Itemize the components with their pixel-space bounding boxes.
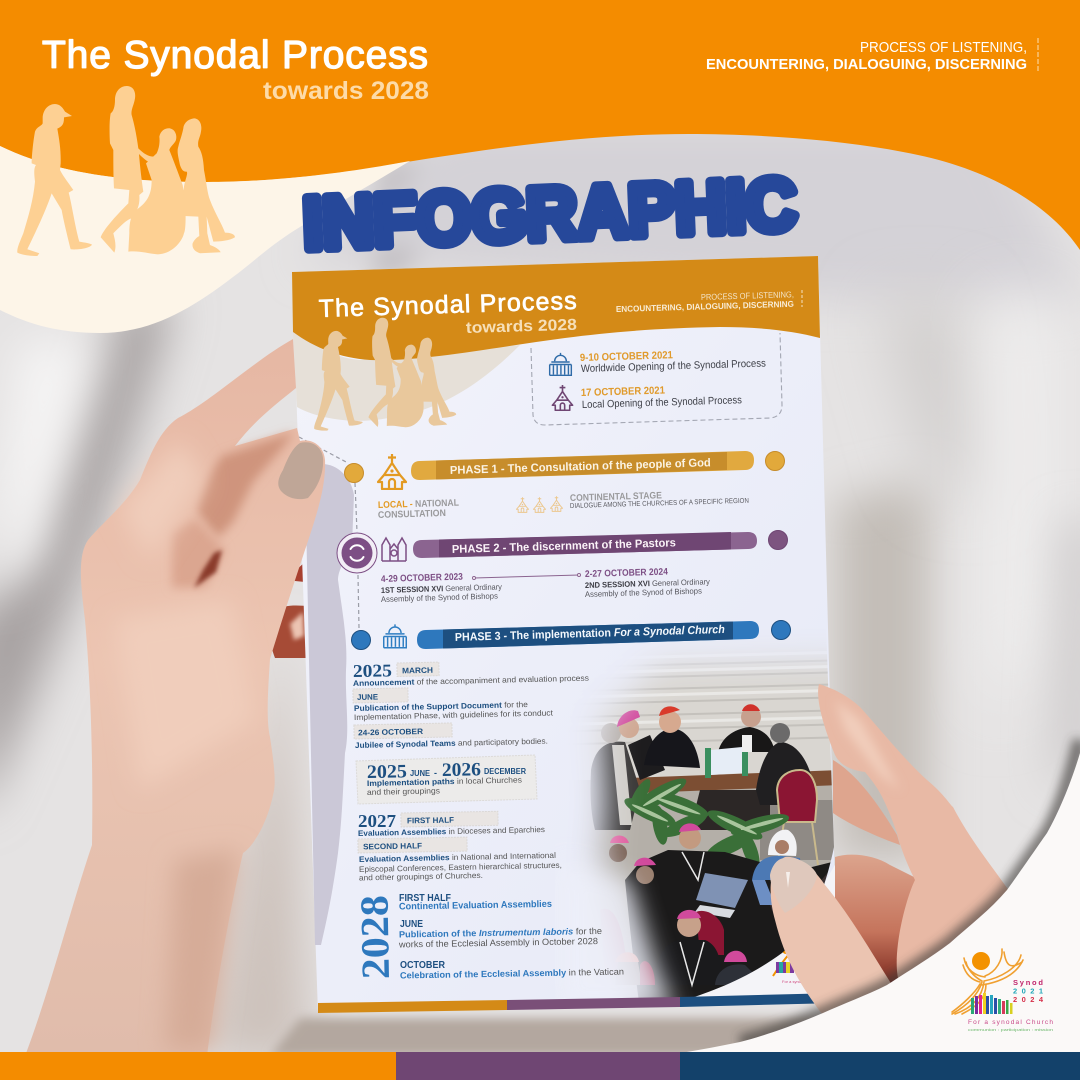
2025-2026 highlighted box: DECEMBER [484,767,526,776]
2027 schedule: Evaluation Assemblies in Dioceses and Eparchies [358,825,545,838]
phase 3 markers [352,630,370,650]
timeline connector [299,437,359,628]
2028 schedule: Continental Evaluation Assemblies [399,899,552,912]
continental stage: CONTINENTAL STAGE [570,490,662,504]
synod logo: 2024 [1013,995,1044,1004]
local consultation: LOCAL - NATIONAL [378,498,459,511]
2025 schedule: Publication of the Support Document for the [354,700,529,713]
poster header text [318,287,802,337]
session one: 4-29 OCTOBER 2023 [381,572,463,585]
ring finger [835,855,920,995]
tagline [706,38,1038,73]
synod logo: communion : participation : mission [968,1028,1053,1032]
bishop with pectoral chain [679,830,701,849]
lower-right white corner with curve shadow [660,740,1080,1056]
tag: second half: SECOND HALF [363,841,422,851]
2027 schedule: Evaluation Assemblies in National and International [359,851,556,864]
2025 schedule: Announcement of the accompaniment and evaluation process [353,674,589,688]
2025 schedule: 2025 [353,660,392,681]
2028 schedule: JUNE [400,919,423,930]
phase 1 [344,451,784,521]
poster left shadow [305,464,354,945]
2028 schedule: FIRST HALF [399,893,451,904]
man seen from behind [756,742,815,805]
index finger and palm [818,684,1012,985]
thumb nail [278,442,323,499]
2027 schedule: and other groupings of Churches. [359,871,483,882]
phase 3 [352,620,790,650]
thumb [771,857,892,1018]
opening dates box [531,333,782,425]
tagline: PROCESS OF LISTENING, [860,39,1027,56]
phase 1 markers [344,464,364,482]
poster footer strips [318,993,838,1013]
footer strip: purple [507,997,680,1010]
red chair [777,770,817,822]
tag: june [353,688,408,703]
session two: 2-27 OCTOBER 2024 [585,567,669,580]
front group dark mass [625,850,830,998]
opening dates box: 9-10 OCTOBER 2021 [580,349,673,364]
tag: first half [401,811,498,827]
2025 schedule: Implementation Phase, with guidelines for its conduct [354,708,554,722]
title: The Synodal Process [42,34,428,77]
tag: second half [358,837,467,853]
phase 3 bar [417,621,759,649]
subtitle: towards 2028 [263,77,429,105]
phase 1 bar [411,451,754,480]
photo fog at lower left [584,858,687,998]
phase 2 heading: PHASE 2 - The discernment of the Pastors [452,537,676,556]
cream wave [0,146,410,333]
middle finger [833,760,900,845]
poster tagline: PROCESS OF LISTENING, [701,289,794,302]
synod logo: 2021 [1013,986,1043,996]
tag: 24-26 october: 24-26 OCTOBER [358,727,423,737]
table [630,770,840,793]
phase 2: 2ND SESSION XVI General Ordinary [585,577,710,590]
phase 3 heading: PHASE 3 - The implementation For a Synodal Church [455,624,725,644]
tag: first half: FIRST HALF [407,816,454,825]
2025-2026 highlighted box: JUNE [410,769,431,778]
poster title: The Synodal Process [318,287,577,323]
poster walkers silhouette [311,316,457,431]
left hand holding poster [25,339,325,1056]
phase 2 [337,530,788,604]
opening dates box: 17 OCTOBER 2021 [581,385,665,399]
vertical year 2028: 2028 [352,895,398,980]
2025-2026 highlighted box: - [434,768,437,778]
nun [768,830,797,856]
cycle marker [337,533,377,573]
2025-2026 highlighted box: Implementation paths in local Churches [367,775,522,788]
fingers behind poster [269,562,310,658]
poster sheet: For a synodal [782,979,806,984]
logo wordmark: Synod [1013,978,1043,987]
thumb nail [770,858,817,913]
footer strip: navy [680,993,838,1007]
tag: march [397,662,439,676]
poster header wave [293,332,520,421]
2027 schedule: Episcopal Conferences, Eastern hierarchical structures, [359,861,562,874]
tag: march: MARCH [402,666,433,675]
icon: church purple [552,385,573,410]
icons: three small churches [516,497,529,512]
icon: twin tower cathedral [382,538,406,561]
people back row [590,742,640,830]
icon: church orange [378,454,406,489]
phase 1: CONSULTATION [378,508,446,521]
palm crease [172,518,225,588]
photo: synod participants at tables [582,648,834,998]
laptop and bottles [711,747,742,775]
poster subtitle: towards 2028 [466,317,577,337]
2025 schedule [353,660,589,750]
2025-2026 highlighted box: 2026 [442,759,481,781]
plant left [624,778,708,845]
laptops [696,873,748,908]
2027 schedule: 2027 [358,811,396,831]
opening dates box: Local Opening of the Synodal Process [582,394,742,411]
poster bottom white curve area with mini logo [679,860,838,1006]
tag: june: JUNE [357,692,379,702]
2027 schedule [358,811,562,882]
2025-2026 highlighted box: 2025 [367,761,407,783]
silhouette: people walking with wheelchair [17,86,235,256]
bottom colour bar [0,1052,1080,1080]
phase 1 heading: PHASE 1 - The Consultation of the people of God [450,457,711,477]
session timeline arrow [474,575,579,578]
phase 2: 1ST SESSION XVI General Ordinary [381,582,502,595]
opening dates box: Worldwide Opening of the Synodal Process [581,358,766,375]
2028 schedule: Publication of the Instrumentum laboris for the [399,926,602,939]
right hand holding poster [770,684,1012,1018]
poster sheet [292,256,838,1013]
plant right [708,810,790,862]
icon: basilica blue [550,353,571,375]
phase 1: DIALOGUE AMONG THE CHURCHES OF A SPECIFIC REGION [570,498,749,510]
pink-capped heads [634,858,656,866]
logo figure [952,949,1023,1014]
logo sun [972,952,990,970]
phase 2: Assembly of the Synod of Bishops [585,587,702,599]
phase 2 marker right [768,530,788,550]
2028 schedule: OCTOBER [400,960,446,971]
2025 schedule: Jubilee of Synodal Teams and participatory bodies. [355,737,548,750]
2028 schedule: works of the Ecclesial Assembly in October 2028 [398,936,598,950]
footer strip: orange [318,1000,507,1013]
poster header text: ENCOUNTERING, DIALOGUING, DISCERNING [616,299,794,314]
phase 2 bar [413,532,757,558]
2028 schedule: Celebration of the Ecclesial Assembly in the Vatican [400,967,624,980]
infographic headline: INFOGRAPHIC [301,162,798,265]
2025-2026 highlighted box [356,755,537,804]
icon: basilica [384,624,406,648]
phase 2: Assembly of the Synod of Bishops [381,592,498,604]
logo people [971,993,1012,1014]
2028 schedule [352,893,624,980]
synod logo: For a synodal Church [968,1019,1053,1026]
tagline: ENCOUNTERING, DIALOGUING, DISCERNING [706,56,1027,73]
top orange header shape [0,0,1080,250]
middle finger shading [197,432,294,538]
synod logo [952,949,1053,1032]
tag: 24-26 october [354,723,452,739]
2025-2026 highlighted box: and their groupings [367,786,440,797]
